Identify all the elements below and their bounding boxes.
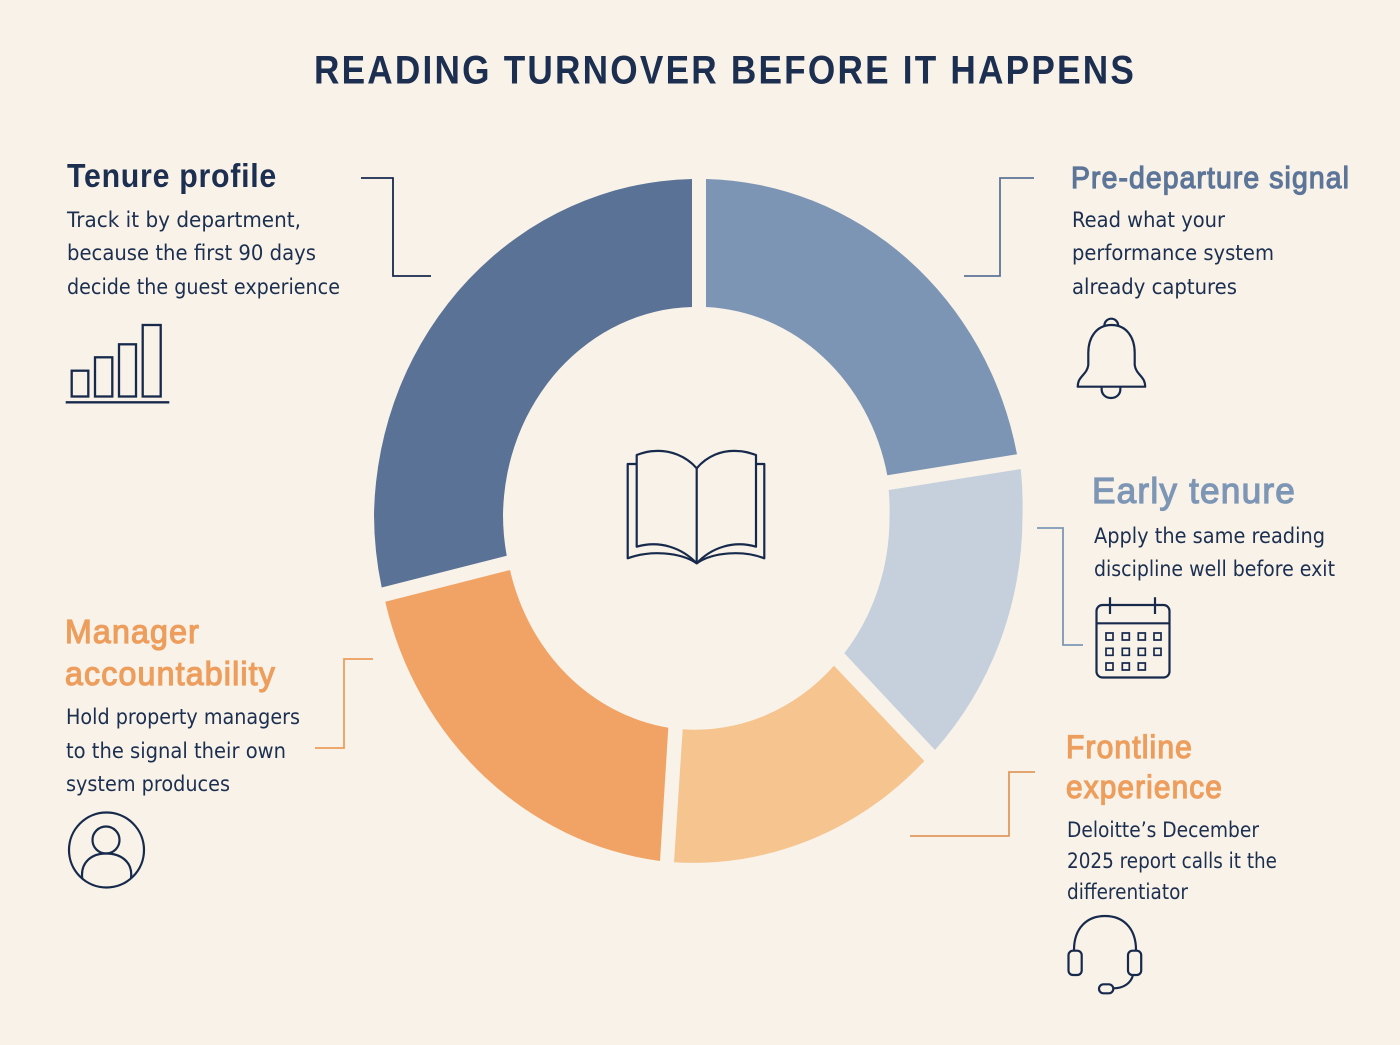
heading: Tenure profile xyxy=(67,157,277,194)
text block: Hold property managers xyxy=(66,705,300,730)
text block: Apply the same reading xyxy=(1094,524,1325,549)
heading: Early tenure xyxy=(1092,470,1296,511)
icon: headset xyxy=(1068,916,1141,993)
text block xyxy=(1072,208,1274,300)
text block: 2025 report calls it the xyxy=(1067,849,1277,874)
heading: Frontline xyxy=(1066,729,1193,765)
panel: manager accountability xyxy=(65,613,373,888)
panel: tenure profile xyxy=(66,157,431,402)
panel: frontline experience xyxy=(910,729,1277,993)
text block: system produces xyxy=(66,772,230,797)
text block: because the first 90 days xyxy=(67,241,316,266)
segment: pre-departure signal xyxy=(706,179,1017,475)
text block: Read what your xyxy=(1072,208,1225,233)
heading: Pre-departure signal xyxy=(1071,160,1350,195)
icon: person xyxy=(69,812,144,888)
heading xyxy=(1066,729,1223,805)
segment: manager accountability xyxy=(385,570,668,861)
text block: Track it by department, xyxy=(66,208,301,233)
text block: performance system xyxy=(1072,241,1274,266)
icon: open book xyxy=(628,451,764,563)
segment: early tenure xyxy=(844,469,1023,750)
heading xyxy=(65,613,276,692)
connector xyxy=(964,178,1034,276)
icon: calendar xyxy=(1096,597,1170,678)
text block xyxy=(1094,524,1335,582)
text block: to the signal their own xyxy=(66,739,286,764)
connector xyxy=(910,772,1035,836)
text block: Deloitte’s December xyxy=(1067,818,1259,843)
icon: bell xyxy=(1078,319,1145,398)
text block: decide the guest experience xyxy=(67,275,340,300)
heading: accountability xyxy=(65,655,276,692)
text block xyxy=(66,705,300,797)
panel: early tenure xyxy=(1037,470,1335,678)
text block xyxy=(66,208,340,300)
heading: experience xyxy=(1066,769,1223,805)
text block xyxy=(1067,818,1277,905)
icon: bar chart xyxy=(66,325,169,402)
text block: already captures xyxy=(1072,275,1237,300)
panel: pre-departure signal xyxy=(964,160,1350,398)
segment: tenure profile xyxy=(374,179,692,588)
heading: Manager xyxy=(65,613,200,650)
connector xyxy=(361,178,431,276)
connector xyxy=(1037,528,1083,645)
donut chart xyxy=(374,179,1023,863)
text block: discipline well before exit xyxy=(1094,557,1335,582)
text block: differentiator xyxy=(1067,880,1188,905)
title: READING TURNOVER BEFORE IT HAPPENS xyxy=(314,48,1136,92)
connector xyxy=(315,659,373,748)
segment: frontline experience xyxy=(674,666,924,863)
